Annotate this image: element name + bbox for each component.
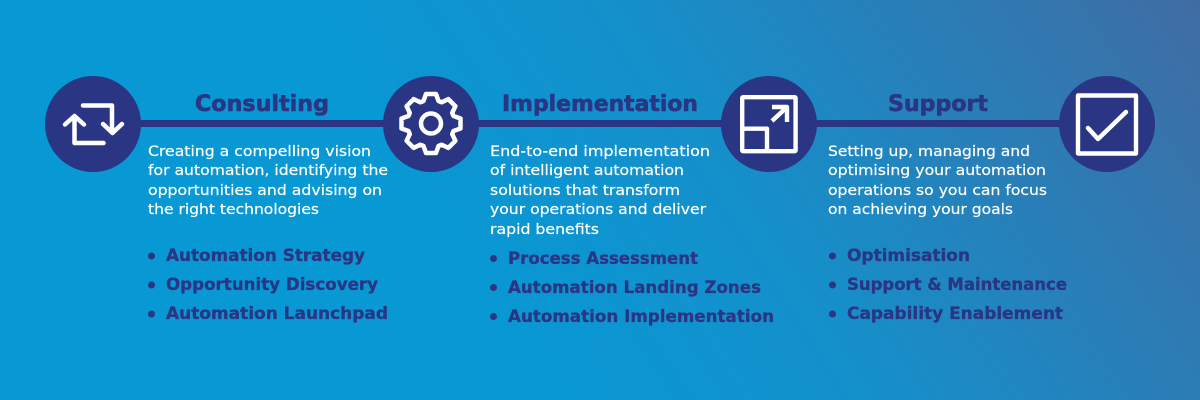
text block: support description: Setting up, managing and xyxy=(828,144,1030,160)
list: implementation services: Process Assessment xyxy=(508,249,698,268)
list: support services: Optimisation xyxy=(847,246,970,265)
text block: consulting description: Creating a compelling vision xyxy=(148,144,371,160)
list: implementation services xyxy=(490,249,774,326)
text block: consulting description: opportunities and advising on xyxy=(148,183,382,199)
text block: implementation description: of intelligent automation xyxy=(490,163,684,179)
list: implementation services: Automation Landing Zones xyxy=(508,278,761,297)
text block: implementation description: your operations and deliver xyxy=(490,202,706,218)
list: consulting services: Automation Launchpad xyxy=(166,304,388,323)
text block: consulting description xyxy=(148,144,388,218)
text block: support description: on achieving your goals xyxy=(828,202,1013,218)
list: consulting services: Opportunity Discovery xyxy=(166,275,378,294)
list: support services: Support & Maintenance xyxy=(847,275,1067,294)
text block: implementation description: solutions that transform xyxy=(490,183,680,199)
heading: Implementation: Implementation xyxy=(502,91,698,117)
list: support services xyxy=(829,246,1067,323)
list: implementation services: Automation Implementation xyxy=(508,307,774,326)
icon: expand square xyxy=(721,76,817,172)
list: consulting services: Automation Strategy xyxy=(166,246,365,265)
text block: implementation description: rapid benefits xyxy=(490,222,599,238)
text block: consulting description: the right technologies xyxy=(148,202,319,218)
heading: Support: Support xyxy=(888,91,988,117)
text block: support description: optimising your automation xyxy=(828,163,1046,179)
timeline connector line xyxy=(93,120,1107,127)
icon: repeat arrows xyxy=(45,76,141,172)
icon: gear xyxy=(383,76,479,172)
text block: consulting description: for automation, identifying the xyxy=(148,163,388,179)
list: support services: Capability Enablement xyxy=(847,304,1063,323)
text block: support description xyxy=(828,144,1047,218)
text block: support description: operations so you can focus xyxy=(828,183,1047,199)
heading: Consulting: Consulting xyxy=(195,91,329,117)
text block: implementation description: End-to-end implementation xyxy=(490,144,710,160)
text block: implementation description xyxy=(490,144,710,238)
icon: checkbox xyxy=(1059,76,1155,172)
list: consulting services xyxy=(148,246,388,323)
